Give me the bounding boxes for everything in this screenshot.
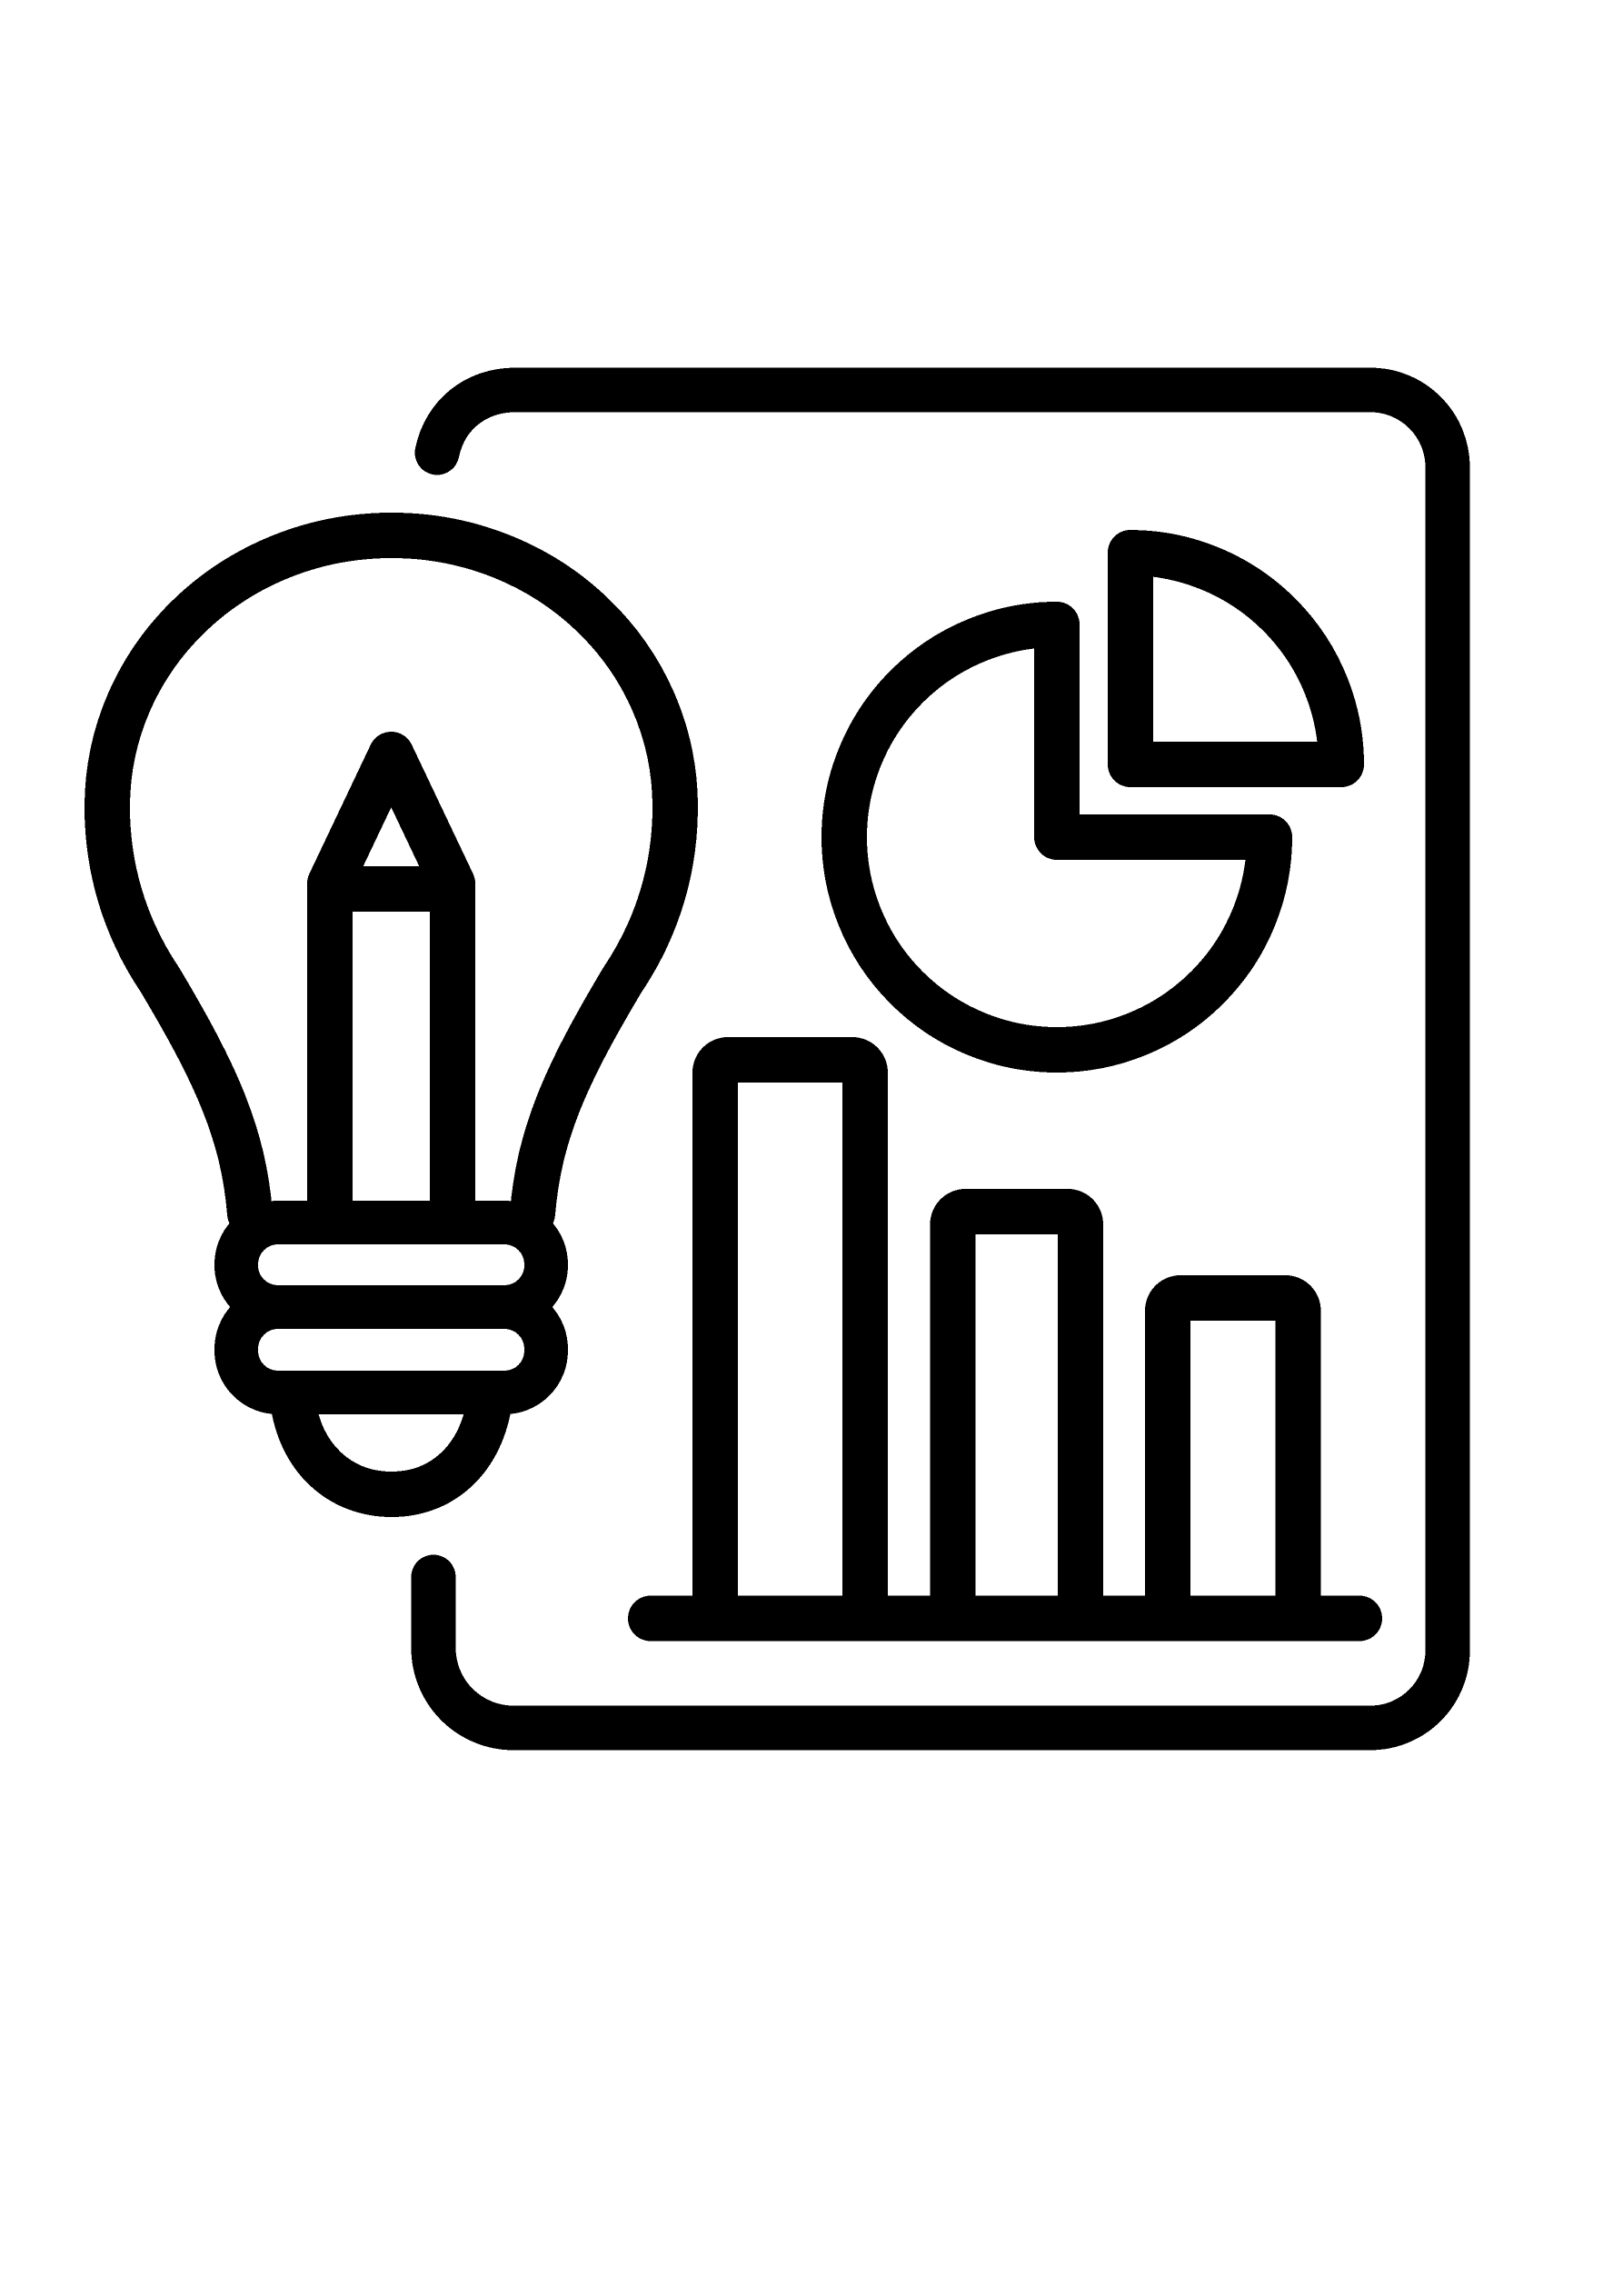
bar chart — [651, 1060, 1359, 1618]
icon: pencil inside bulb — [330, 754, 453, 1209]
icon: light bulb — [107, 535, 675, 1494]
bar: tall — [715, 1060, 865, 1618]
bulb base cap — [293, 1400, 490, 1494]
chart baseline — [651, 1596, 1359, 1642]
bulb glass outline — [107, 535, 675, 1213]
bulb socket upper ring — [236, 1223, 546, 1307]
chart: large pie with missing quarter — [844, 624, 1270, 1050]
chart: small pie slice — [1130, 553, 1341, 764]
panel: report page outline — [433, 390, 1448, 1728]
bulb socket lower ring — [236, 1307, 546, 1393]
bar: short — [1168, 1298, 1298, 1618]
bar: medium — [952, 1212, 1080, 1618]
